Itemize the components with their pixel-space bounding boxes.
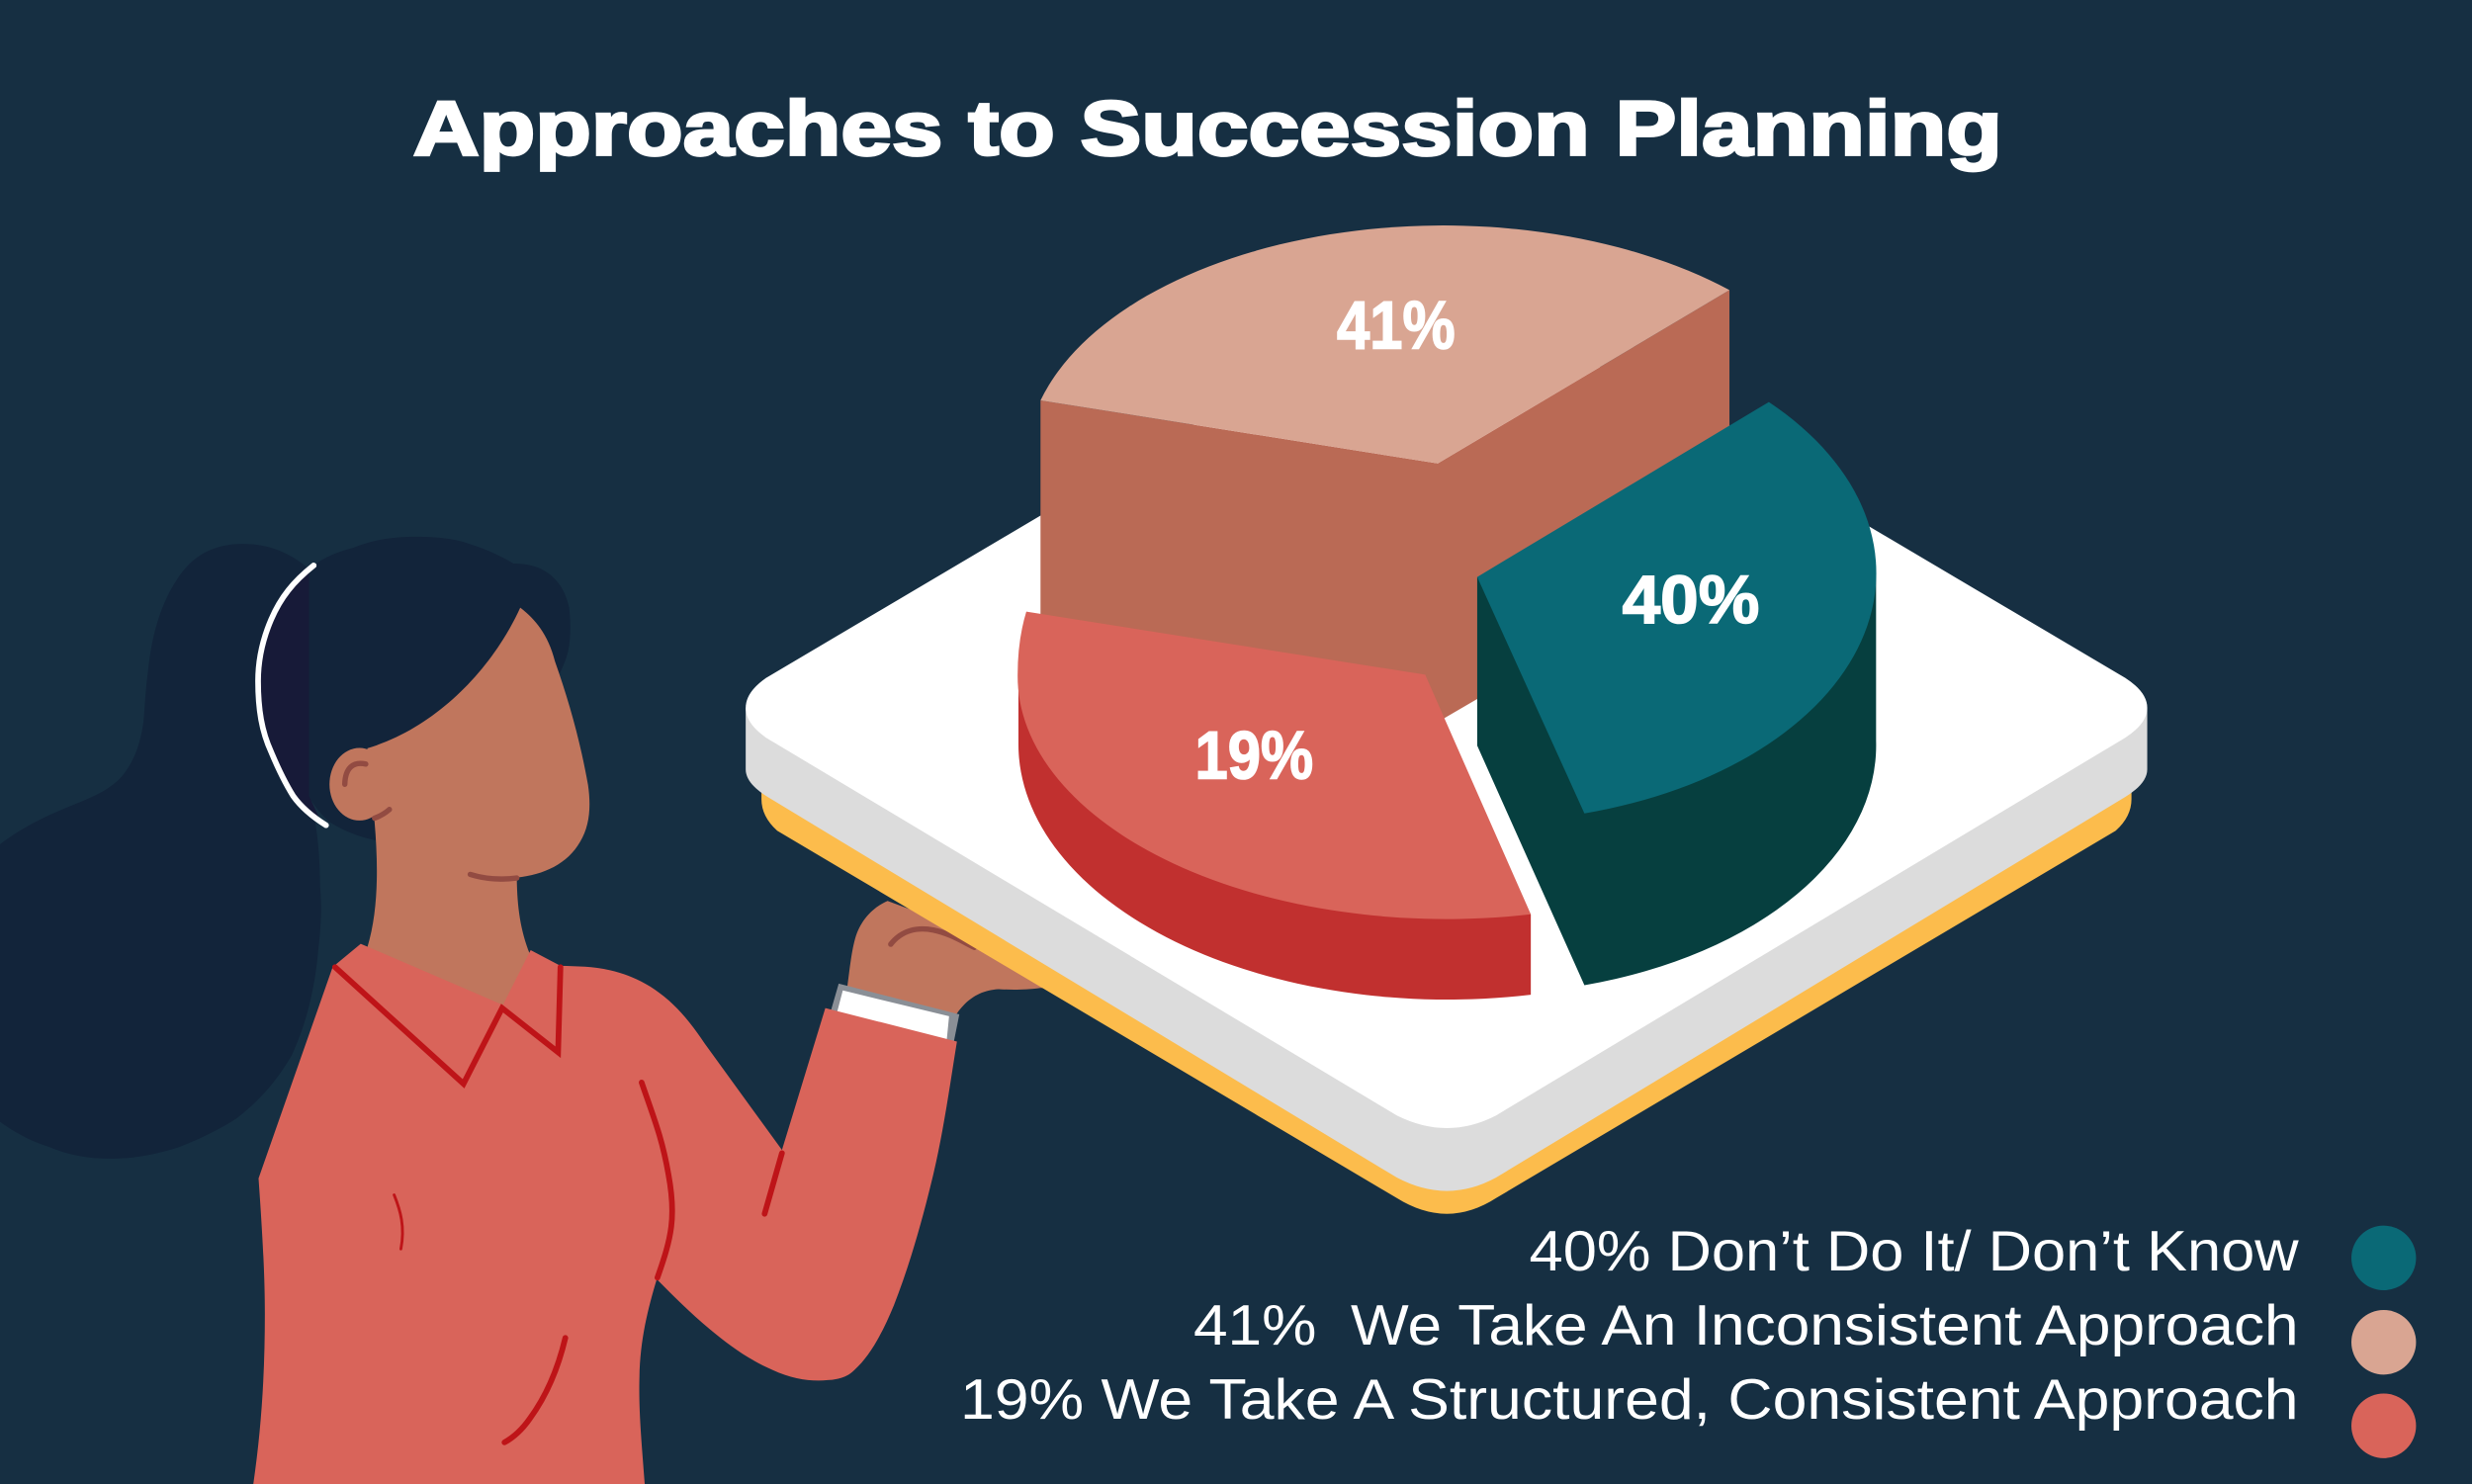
platform: white top (746, 276, 2148, 1128)
collar lines (335, 967, 561, 1084)
shirt cuff (831, 984, 959, 1042)
hair: ponytail (0, 544, 321, 1159)
legend row: 19% (960, 1368, 2416, 1458)
ear lines (345, 763, 390, 819)
platform: yellow base (761, 772, 2132, 1214)
pie slice: 19%: 19% (1195, 718, 1313, 794)
pie slice: 41%: 41% (1337, 287, 1456, 363)
headband line (258, 566, 326, 826)
title: Approaches to Succession Planning (413, 84, 2002, 171)
legend (960, 1220, 2416, 1458)
shirt (253, 944, 957, 1484)
legend row: 41%: 41% We Take An Inconsistent Approach (1193, 1294, 2299, 1357)
legend row: 19%: 19% We Take A Structured, Consistent Approach (960, 1368, 2299, 1432)
platform (746, 276, 2148, 1214)
pie slice: 41% (1040, 225, 1729, 722)
pie slice: 40% (1477, 402, 1877, 986)
platform: grey side (746, 708, 2148, 1191)
ear (329, 748, 390, 821)
headband shadow (258, 569, 321, 823)
neck and face (367, 608, 589, 1012)
legend row: 41% (1193, 1294, 2416, 1374)
pie slice: 40%: 40% (1623, 562, 1759, 638)
hand crease (891, 929, 974, 947)
legend row: 40%: 40% Don’t Do It/ Don’t Know (1530, 1220, 2299, 1283)
illustration: woman (0, 537, 1135, 1484)
hair: head (309, 537, 571, 840)
jaw line (471, 874, 517, 879)
hand (846, 901, 1135, 1018)
pie slice: 19% (1017, 612, 1531, 1000)
shirt fold lines (395, 1083, 782, 1442)
